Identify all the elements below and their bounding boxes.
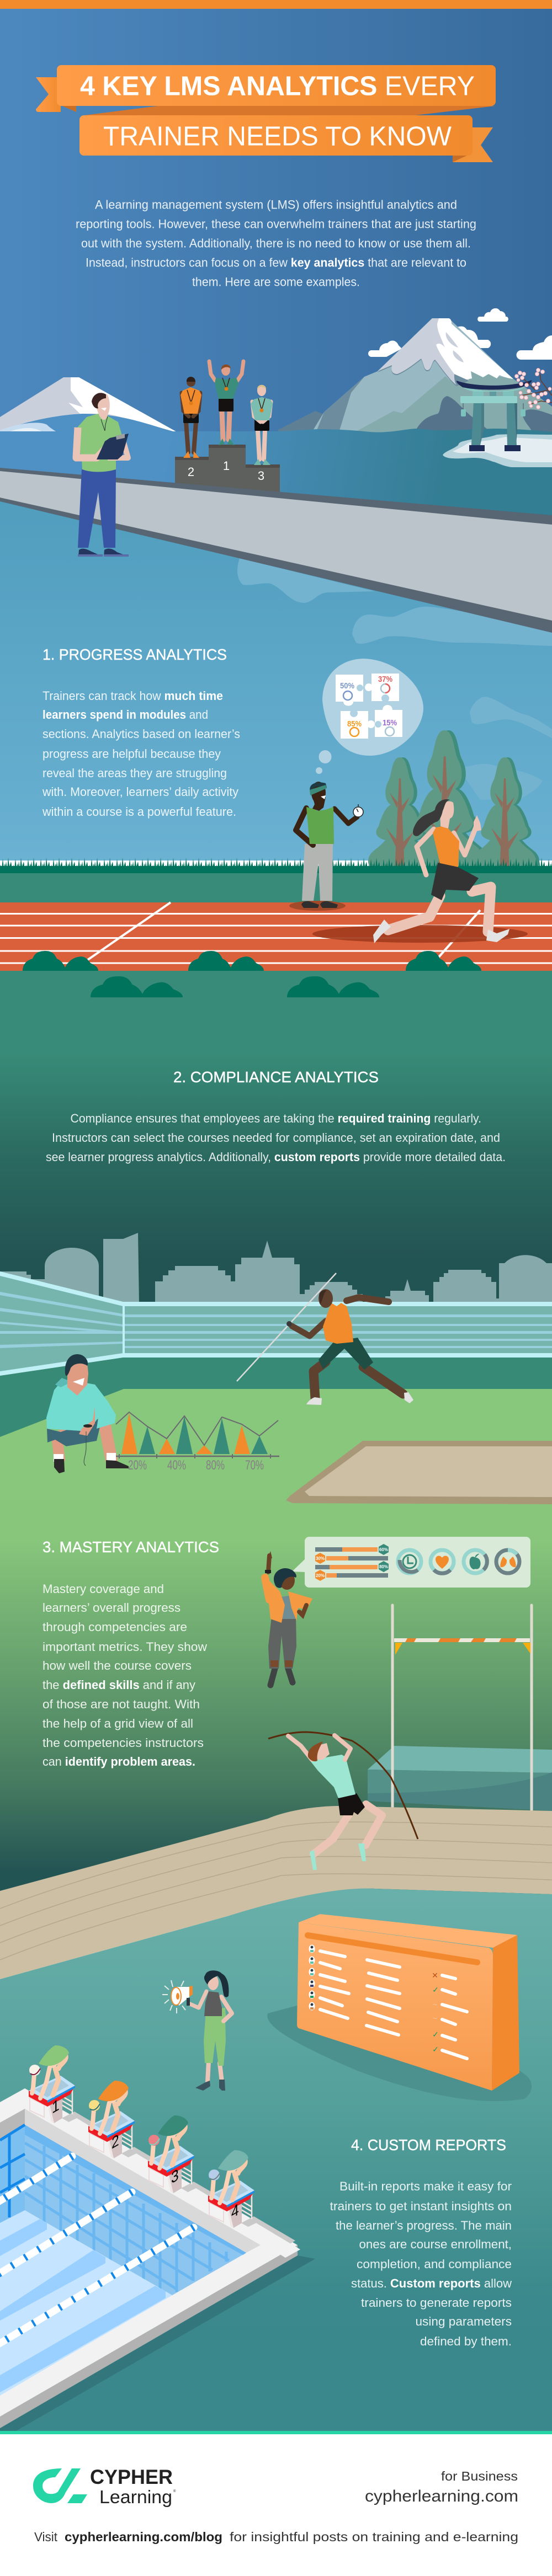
text: progress analytics: reveal the areas they are struggling [43,766,227,780]
bushes on track edge [23,951,481,971]
text: mastery analytics [43,1582,207,1768]
text: progress analytics: with. Moreover, learners’ daily activity [42,785,238,799]
progress bars [315,1544,389,1581]
bushes lower row [91,976,379,997]
text: mastery analytics: the defined skills and if any [43,1678,195,1692]
progress bars: 20% [316,1573,325,1578]
heart icon [436,1556,449,1569]
text: mastery analytics: how well the course covers [43,1659,192,1672]
apple icon [470,1554,480,1569]
background: sky [0,0,552,496]
footer: website: cypherlearning.com [365,2487,518,2505]
title text line 1: 4 KEY LMS ANALYTICS EVERY [80,72,475,101]
status marks: ~ [433,2000,437,2009]
footer: visit line: for insightful posts on training and e-learning [230,2530,518,2544]
footer: visit line: cypherlearning.com/blog [65,2530,222,2544]
footer: visit line [34,2530,518,2544]
intro paragraph: reporting tools. However, these can overwhelm trainers that are just starting [76,217,476,231]
status marks: ~ [433,2014,437,2023]
swimmer block 3: 3 [171,2166,179,2188]
text: compliance analytics: Compliance ensures that employees are taking the required training regularly. [71,1111,481,1125]
text: custom reports [330,2179,512,2348]
text: progress analytics [42,689,240,819]
clipboard [97,434,129,459]
text: mastery analytics: learners’ overall progress [43,1601,181,1615]
text: custom reports: trainers to generate reports [361,2296,512,2310]
status marks: ✓ [432,1985,439,1994]
combo chart: 20% [128,1458,147,1473]
torii gate with cherry blossoms [457,368,552,451]
footer: for business: for Business [441,2469,518,2483]
title text line 2: TRAINER NEEDS TO KNOW [103,121,452,151]
logo wordmark: CYPHER [90,2466,173,2488]
swimming pool [0,2088,315,2431]
text: custom reports: status. Custom reports allow [351,2276,512,2290]
swimmer block 3 [148,2115,240,2223]
woman with megaphone [162,1970,232,2091]
sea [0,429,552,530]
intro paragraph: them. Here are some examples. [192,275,360,289]
athlete: third place [251,385,273,465]
text: progress analytics: within a course is a powerful feature. [42,805,236,819]
foam on the right island [443,434,552,467]
pool left wall [0,2125,25,2223]
footer background [0,2434,552,2576]
clouds [368,308,552,360]
text: mastery analytics: can identify problem areas. [43,1755,195,1768]
stopwatch [353,804,363,817]
dashboard speech bubble [292,1537,530,1588]
intro paragraph: Instead, instructors can focus on a few key analytics that are relevant to [86,256,466,269]
puzzle pieces [336,674,402,739]
grass [0,857,552,873]
rings with icons [398,1550,519,1573]
shallow water [0,2210,172,2396]
left snowy mountain [0,377,178,454]
combo chart: 80% [206,1458,225,1473]
javelin [237,1273,336,1381]
trees [368,730,539,871]
athlete: second place [181,377,201,458]
sand pit [286,1441,552,1504]
text: custom reports: trainers to get instant insights on [330,2199,512,2213]
text: mastery analytics: important metrics. They show [43,1640,207,1654]
swimmer block 4 [208,2150,300,2258]
hurdle bar [392,1605,532,1813]
infield strip [0,873,552,902]
swimmer block 1: 1 [52,2096,60,2118]
puzzle percentages: 50% [340,681,354,691]
podium: 2 [188,465,194,479]
text: custom reports: Built-in reports make it easy for [339,2179,512,2193]
text: compliance analytics: Instructors can select the courses needed for compliance, set an expiration date, and [52,1131,500,1145]
pool floor [25,2125,246,2295]
podium and medal winners [175,361,280,493]
top orange bar [0,0,552,9]
text: custom reports: the learner’s progress. The main [336,2219,512,2232]
logo mark [33,2468,87,2503]
landing mat [368,1746,552,1815]
heading: mastery analytics: 3. MASTERY ANALYTICS [43,1538,219,1556]
heading: compliance analytics: 2. COMPLIANCE ANALYTICS [173,1068,379,1086]
coach shoes [78,548,129,557]
heading: progress analytics: 1. PROGRESS ANALYTICS [43,646,227,663]
runner [373,799,509,943]
lungs icon [500,1553,516,1567]
progress bars: 80% [379,1564,388,1569]
pool deck [0,2088,298,2417]
beige track curve [0,1806,552,1979]
footer: visit line: Visit [34,2530,58,2544]
snow cap [378,318,513,386]
text: progress analytics: learners spend in modules and [43,708,208,722]
field background [0,1389,552,1899]
pole vaulter [268,1732,418,1870]
pool side wall [0,2245,298,2428]
logo: cypher learning [33,2466,176,2507]
athlete: first place [209,361,243,445]
trainer with stopwatch [296,782,363,908]
text: mastery analytics: through competencies are [43,1620,187,1634]
text: progress analytics: sections. Analytics based on learner’s [43,727,240,741]
javelin thrower [237,1273,413,1405]
coach head [95,393,110,420]
text: mastery analytics: of those are not taught. With [43,1697,200,1711]
logo: cypher learning: ® [173,2489,176,2493]
thought bubble with puzzle chart: 37% [378,675,392,684]
combo chart: 70% [245,1458,264,1473]
status marks [432,1971,439,2054]
lane shadows [0,2219,166,2392]
swimmer block 2: 2 [112,2131,119,2153]
section two background [0,971,552,1307]
pool section background [0,1888,552,2431]
progress bars: 60% [379,1547,388,1552]
right mountain with snow cap and clouds [278,308,552,436]
intro paragraph: out with the system. Additionally, there is no need to know or use them all. [81,236,471,250]
status marks: ✓ [432,2045,439,2054]
text: compliance analytics [46,1111,506,1164]
swimmer block 4: 4 [231,2200,239,2222]
text: compliance analytics: see learner progress analytics. Additionally, custom reports provide more detailed data. [46,1150,506,1164]
city skyline [0,1233,552,1305]
intro paragraph [76,197,476,289]
combo chart: 40% [167,1458,186,1473]
coach with clipboard [76,393,129,557]
swimmer block 1 [29,2045,121,2153]
lower water background [0,498,552,861]
stadium stands [0,1271,552,1376]
title banner [36,65,496,162]
swimmer block 2 [88,2081,181,2188]
crouching coach [46,1354,129,1473]
lower stadium wall [0,1358,552,1437]
thought bubble with puzzle chart: 85% [347,719,362,729]
coach legs [78,469,116,548]
combo chart [116,1412,279,1473]
logo: cypher learning: Learning [99,2487,172,2507]
text: mastery analytics: the help of a grid view of all [43,1717,193,1730]
lane ropes [0,2156,194,2347]
clock icon [403,1555,416,1568]
water shade blobs [237,558,552,800]
pool shadow [0,2256,315,2431]
text: custom reports: using parameters [415,2315,512,2328]
learner avatars [309,1945,315,2010]
report rows [320,1951,467,2059]
knee and legs [104,1420,112,1460]
podium: 1 [223,459,230,473]
coach torso [76,414,124,472]
intro paragraph: A learning management system (LMS) offers insightful analytics and [95,197,457,212]
megaphone [162,1980,193,2013]
progress bars: 30% [316,1556,325,1561]
podium [175,445,280,493]
status marks: ✕ [432,1971,438,1980]
text: custom reports: defined by them. [420,2334,512,2348]
text: mastery analytics: the competencies instructors [43,1736,204,1750]
report board [267,1914,532,2101]
running track [0,901,552,971]
footer divider [0,2431,552,2434]
text: custom reports: completion, and compliance [357,2257,512,2271]
status marks: ✓ [432,2030,439,2039]
instructor pointing up [265,1551,312,1685]
text: progress analytics: Trainers can track how much time [43,689,223,703]
text: progress analytics: progress are helpful because they [43,747,221,761]
thought bubble with puzzle chart: 15% [383,718,397,728]
road band [0,468,552,633]
podium: 3 [258,469,264,483]
heading: custom reports: 4. CUSTOM REPORTS [351,2136,506,2153]
text: custom reports: ones are course enrollment, [359,2237,512,2251]
text: mastery analytics: Mastery coverage and [43,1582,164,1596]
thought bubble with puzzle chart [316,659,423,774]
